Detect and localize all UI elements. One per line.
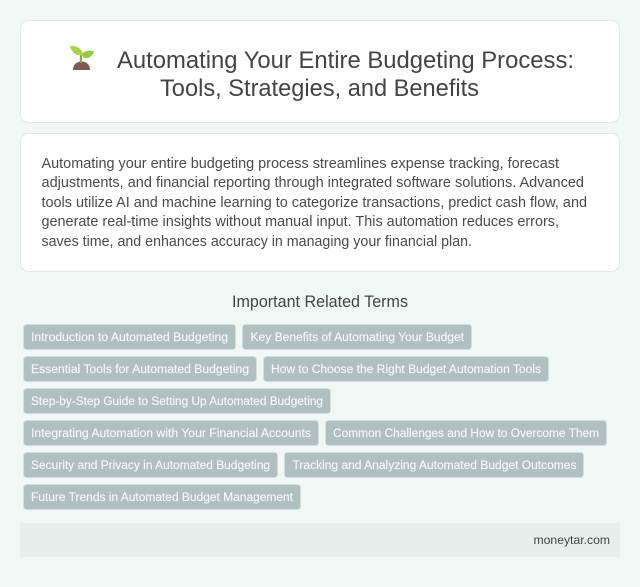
chip: choosing tools bbox=[264, 356, 548, 382]
chip: choosing tools: How to Choose the Right Budget Automation Tools bbox=[271, 362, 541, 376]
chip: key benefits: Key Benefits of Automating Your Budget bbox=[250, 330, 465, 344]
icon: seedling bbox=[70, 46, 94, 70]
panel: related term chips bbox=[24, 324, 606, 510]
title: Tools, Strategies, and Benefits bbox=[160, 75, 479, 102]
footer bbox=[20, 523, 620, 557]
chip: introduction bbox=[24, 324, 236, 350]
chip: integrating automation bbox=[24, 420, 318, 446]
chip: introduction: Introduction to Automated Budgeting bbox=[31, 330, 228, 344]
chip: security and privacy bbox=[24, 452, 278, 478]
title bbox=[117, 47, 574, 102]
chip: future trends: Future Trends in Automated Budget Management bbox=[31, 490, 294, 504]
panel: title card bbox=[20, 20, 620, 122]
text block: summary: generate real-time insights without manual input. This automation reduces errors, bbox=[42, 214, 559, 230]
chip: step-by-step guide bbox=[24, 388, 330, 414]
text block: summary bbox=[42, 156, 587, 250]
chip: step-by-step guide: Step-by-Step Guide to Setting Up Automated Budgeting bbox=[31, 394, 323, 408]
chip: essential tools bbox=[24, 356, 256, 382]
footer: moneytar.com bbox=[534, 533, 610, 547]
chip: common challenges: Common Challenges and How to Overcome Them bbox=[333, 426, 599, 440]
chip: key benefits bbox=[242, 324, 472, 350]
chip: integrating automation: Integrating Automation with Your Financial Accounts bbox=[31, 426, 311, 440]
panel: summary card bbox=[20, 134, 620, 272]
text block: summary: Automating your entire budgeting process streamlines expense tracking, forecast bbox=[42, 156, 559, 172]
chip: security and privacy: Security and Privacy in Automated Budgeting bbox=[31, 458, 270, 472]
text block: summary: tools utilize AI and machine learning to categorize transactions, predict cash flow, and bbox=[42, 195, 587, 211]
chip: common challenges bbox=[326, 420, 606, 446]
chip: tracking outcomes: Tracking and Analyzing Automated Budget Outcomes bbox=[292, 458, 576, 472]
chip: essential tools: Essential Tools for Automated Budgeting bbox=[31, 362, 249, 376]
title: Automating Your Entire Budgeting Process: bbox=[117, 47, 574, 74]
chip: tracking outcomes bbox=[284, 452, 584, 478]
chip: future trends bbox=[24, 484, 300, 510]
text block: summary: adjustments, and financial reporting through integrated software solutions. Advanced bbox=[42, 175, 584, 191]
heading: important related terms: Important Related Terms bbox=[232, 293, 408, 311]
text block: summary: saves time, and enhances accuracy in managing your financial plan. bbox=[42, 234, 472, 250]
